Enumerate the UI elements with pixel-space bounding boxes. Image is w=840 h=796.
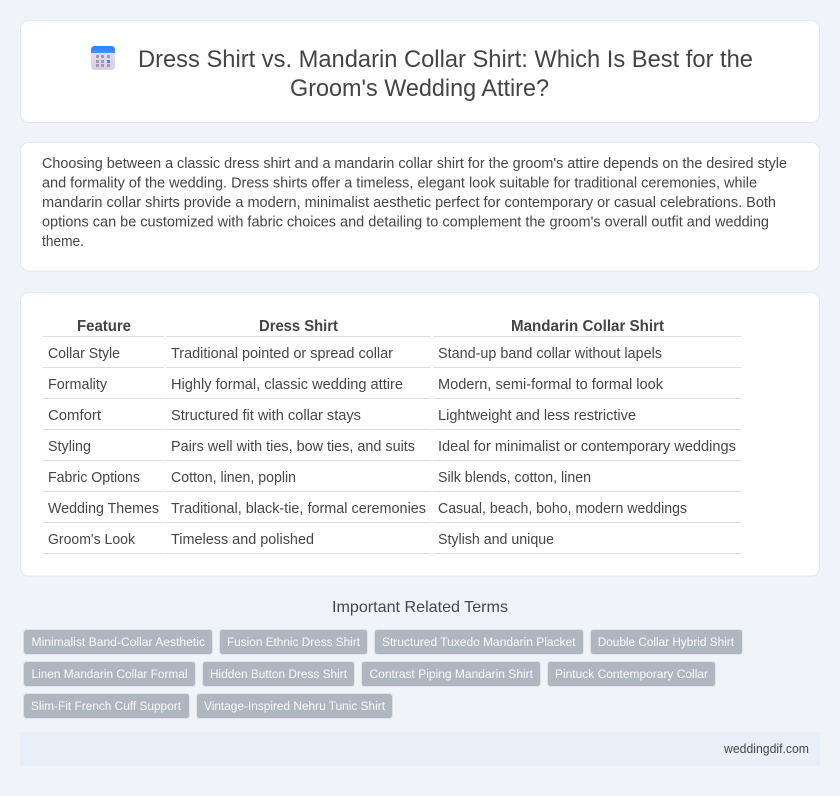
row: styling: Pairs well with ties, bow ties, and suits — [171, 439, 415, 455]
text block: introduction: mandarin collar shirts provide a modern, minimalist aesthetic perfect for contemporary or casual celebrations. Both — [42, 195, 776, 211]
title: Groom's Wedding Attire? — [290, 75, 549, 102]
tag — [590, 630, 742, 654]
text block: introduction: theme. — [42, 234, 84, 250]
row: wedding themes: Traditional, black-tie, formal ceremonies — [171, 501, 426, 517]
row: wedding themes: Casual, beach, boho, modern weddings — [438, 501, 687, 517]
related term tags — [24, 630, 742, 718]
tag — [220, 630, 368, 654]
table header row — [77, 318, 664, 335]
panel: introduction text — [20, 142, 820, 271]
footer — [20, 732, 820, 766]
row: collar style — [48, 346, 662, 362]
row: collar style: Collar Style — [48, 346, 120, 362]
tag: Pintuck Contemporary Collar — [555, 667, 708, 681]
row: wedding themes: Wedding Themes — [48, 501, 159, 517]
row: formality: Highly formal, classic wedding attire — [171, 377, 403, 393]
icon: calendar — [91, 46, 115, 70]
tag — [202, 662, 354, 686]
tag — [548, 662, 716, 686]
row: fabric options: Cotton, linen, poplin — [171, 470, 296, 486]
row: fabric options: Silk blends, cotton, linen — [438, 470, 591, 486]
text block: introduction: and formality of the wedding. Dress shirts offer a timeless, elegant look suitable for traditional ceremonies, while — [42, 176, 757, 192]
table header row: Feature — [77, 318, 131, 335]
row: styling: Styling — [48, 439, 91, 455]
row: styling: Ideal for minimalist or contemporary weddings — [438, 439, 736, 455]
row: collar style: Stand-up band collar without lapels — [438, 346, 662, 362]
row: groom's look — [48, 532, 554, 548]
tag: Structured Tuxedo Mandarin Placket — [382, 635, 576, 649]
tag: Minimalist Band-Collar Aesthetic — [32, 635, 205, 649]
row: comfort: Lightweight and less restrictive — [438, 408, 636, 424]
tag: Linen Mandarin Collar Formal — [32, 667, 188, 681]
tag: Vintage-Inspired Nehru Tunic Shirt — [204, 699, 386, 713]
tag — [24, 662, 196, 686]
row: formality: Modern, semi-formal to formal look — [438, 377, 664, 393]
row: fabric options — [48, 470, 591, 486]
table header row: Dress Shirt — [259, 318, 338, 335]
tag — [24, 694, 190, 718]
tag: Double Collar Hybrid Shirt — [598, 635, 735, 649]
row: collar style: Traditional pointed or spread collar — [171, 346, 393, 362]
row: formality — [48, 377, 664, 393]
panel: comparison table — [20, 292, 820, 576]
tag — [24, 630, 212, 654]
row: groom's look: Stylish and unique — [438, 532, 554, 548]
row: comfort: Structured fit with collar stays — [171, 408, 361, 424]
row: groom's look: Groom's Look — [48, 532, 136, 548]
row: wedding themes — [48, 501, 687, 517]
tag: Slim-Fit French Cuff Support — [31, 699, 182, 713]
row: groom's look: Timeless and polished — [171, 532, 314, 548]
tag — [196, 694, 392, 718]
row: fabric options: Fabric Options — [48, 470, 140, 486]
panel: title header — [20, 20, 820, 122]
footer: weddingdif.com — [723, 741, 809, 756]
title — [138, 46, 753, 102]
row: styling — [48, 439, 736, 455]
title: Dress Shirt vs. Mandarin Collar Shirt: Which Is Best for the — [138, 46, 753, 73]
table header row: Mandarin Collar Shirt — [511, 318, 664, 335]
row: comfort — [48, 408, 636, 424]
text block: introduction — [42, 156, 787, 250]
tag — [374, 630, 584, 654]
row: formality: Formality — [48, 377, 108, 393]
tag — [362, 662, 540, 686]
tag: Fusion Ethnic Dress Shirt — [227, 635, 361, 649]
text block: introduction: options can be customized with fabric choices and detailing to complement the groom's overall outfit and wedding — [42, 214, 769, 230]
text block: introduction: Choosing between a classic dress shirt and a mandarin collar shirt for the groom's attire depends on the desired style — [42, 156, 787, 172]
heading: related terms: Important Related Terms — [332, 599, 508, 616]
tag: Hidden Button Dress Shirt — [210, 667, 348, 681]
row: comfort: Comfort — [48, 408, 101, 424]
tag: Contrast Piping Mandarin Shirt — [370, 667, 534, 681]
